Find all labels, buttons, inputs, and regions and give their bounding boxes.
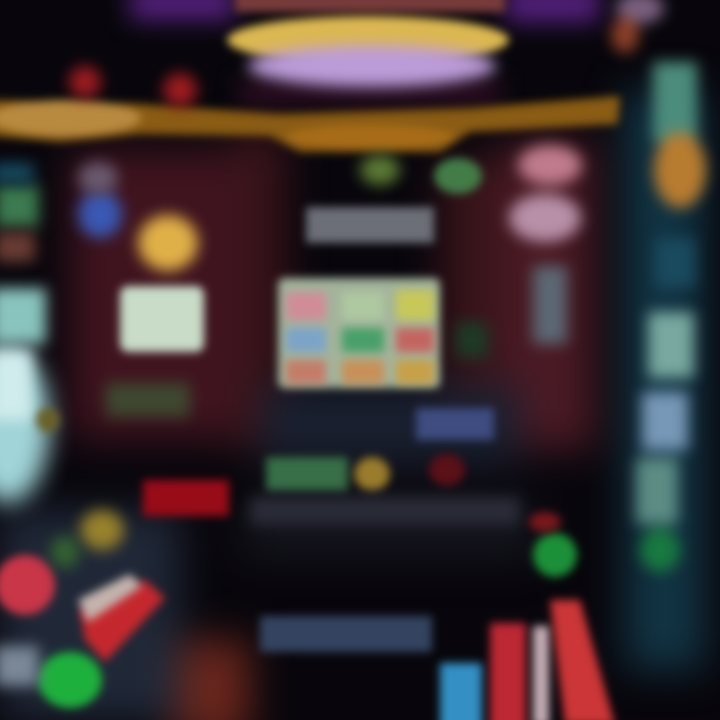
bottom right buttons xyxy=(440,512,615,720)
grey deck xyxy=(250,497,520,525)
second machine xyxy=(78,162,229,516)
orange deck button xyxy=(354,457,390,491)
blue button xyxy=(416,408,494,440)
ceiling purple glow xyxy=(130,0,600,98)
dark red deck button xyxy=(429,454,465,486)
white screen xyxy=(120,286,204,352)
centre machine xyxy=(250,155,520,652)
blue grey lower panel xyxy=(260,616,432,652)
reel 2 xyxy=(342,292,384,320)
lamp crown xyxy=(235,0,505,12)
green top lights xyxy=(360,155,400,185)
blue light xyxy=(78,190,122,238)
reel screen xyxy=(278,278,440,388)
red button panel xyxy=(143,480,229,516)
bottom left buttons xyxy=(0,510,165,708)
right machine lights xyxy=(456,145,582,358)
lamp gold ring xyxy=(227,16,509,64)
red ceiling lights xyxy=(69,66,197,107)
lower display xyxy=(106,383,190,417)
reel 3 xyxy=(396,290,434,320)
top sign xyxy=(306,207,434,243)
green deck display xyxy=(266,457,348,491)
yellow glow xyxy=(138,215,198,271)
gold ceiling band xyxy=(0,96,620,152)
ceiling lamp xyxy=(227,0,509,87)
far right machine xyxy=(611,0,706,572)
lamp lavender underside xyxy=(248,45,496,87)
reel 1 xyxy=(286,292,326,320)
left machine screen xyxy=(0,163,60,503)
